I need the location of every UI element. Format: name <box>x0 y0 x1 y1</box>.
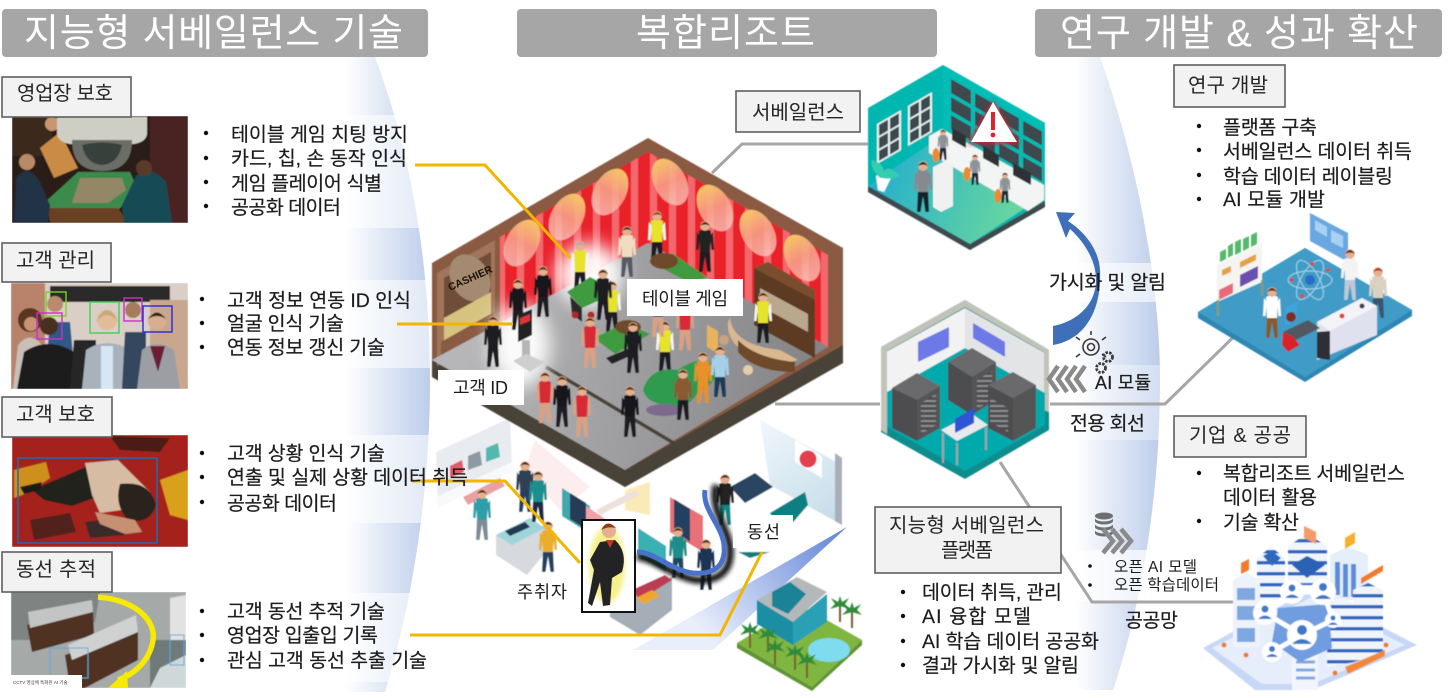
label: 기업 & 공공: 기업 & 공공 <box>1189 424 1291 447</box>
wall grid panels <box>877 110 901 164</box>
blue triangle floor shadow <box>633 527 847 650</box>
list: 고객 관리: 얼굴 인식 기술 <box>227 313 344 335</box>
rack left <box>892 373 940 400</box>
label: 테이블 게임: 테이블 게임 <box>642 289 728 309</box>
illustration: casino floor <box>432 138 843 487</box>
label: 연구 개발 <box>1174 65 1285 107</box>
icon: inbound chevrons <box>1049 366 1085 392</box>
gaming tables <box>567 277 600 308</box>
label: 테이블 게임 <box>627 279 743 316</box>
label: 지능형 서베일런스 플랫폼 <box>875 507 1061 573</box>
list: 고객 보호: 공공화 데이터 <box>227 493 337 515</box>
list: platform: 결과 가시화 및 알림 <box>922 655 1079 677</box>
label: 서베일런스: 서베일런스 <box>752 101 844 124</box>
kiosk <box>518 309 532 342</box>
list: 영업장 보호: 카드, 칩, 손 동작 인식 <box>231 148 407 170</box>
store tables <box>496 518 545 575</box>
list: platform: AI 학습 데이터 공공화 <box>922 631 1099 653</box>
list: 고객 보호: 연출 및 실제 상황 데이터 취득 <box>227 467 468 489</box>
label: 연구 개발: 연구 개발 <box>1188 74 1268 97</box>
label: 주취자: 주취자 <box>517 582 567 602</box>
list: 고객 관리 <box>200 290 411 359</box>
label: 동선 추적: 동선 추적 <box>16 558 96 581</box>
label: 고객 보호: 고객 보호 <box>16 403 95 426</box>
list: platform: 데이터 취득, 관리 <box>922 582 1062 604</box>
label: 고객 ID <box>438 370 524 405</box>
illustration: research lab <box>1198 213 1412 382</box>
label: 동선 추적 <box>2 552 112 592</box>
dealers behind tables <box>618 226 636 277</box>
connector lines: gray network <box>712 144 1258 602</box>
label: 동선: 동선 <box>747 522 780 542</box>
highlighted person: 주취자 <box>582 520 635 612</box>
icon: database and chevrons <box>1095 512 1131 553</box>
icon: AI module gears <box>1076 331 1112 372</box>
photo: fallen customer on carpet <box>12 435 188 547</box>
label: 공공망: 공공망 <box>1125 610 1178 632</box>
list: 고객 관리: 고객 정보 연동 ID 인식 <box>227 290 411 312</box>
list: 영업장 보호: 게임 플레이어 식별 <box>231 173 382 195</box>
bar counter <box>728 318 798 363</box>
list: platform <box>901 582 1099 677</box>
label: 고객 ID: 고객 ID <box>453 378 508 398</box>
list: 동선 추적: 관심 고객 동선 추출 기술 <box>227 650 427 672</box>
illustration: resort <box>737 577 862 691</box>
list: research: AI 모듈 개발 <box>1223 189 1325 211</box>
photo: face recognition group <box>11 283 188 389</box>
label: 전용 회선: 전용 회선 <box>1070 413 1145 435</box>
list: 동선 추적 <box>200 601 427 672</box>
list: research: 플랫폼 구축 <box>1223 117 1317 139</box>
list: 동선 추적: 영업장 입출입 기록 <box>227 625 378 647</box>
illustration: smart city <box>1203 526 1417 690</box>
plant <box>876 172 892 192</box>
label: 동선 <box>733 515 793 548</box>
list: 동선 추적: 고객 동선 추적 기술 <box>227 601 385 623</box>
liquor shelf and bar <box>754 268 815 358</box>
shelf <box>1217 243 1262 302</box>
label: 기업 & 공공 <box>1174 416 1306 457</box>
label: 서베일런스 <box>736 91 860 132</box>
CASHIER sign: CASHIER <box>446 263 495 294</box>
movement path <box>637 485 730 580</box>
list: 영업장 보호 <box>204 124 408 219</box>
label: 가시화 및 알림: 가시화 및 알림 <box>1049 272 1166 294</box>
label: 고객 보호 <box>2 397 112 437</box>
list: open data <box>1088 558 1219 594</box>
background: left blue crescent <box>340 57 432 692</box>
list: 고객 관리: 연동 정보 갱신 기술 <box>227 337 385 359</box>
desk and operators <box>929 129 1044 211</box>
list: open data: 오픈 학습데이터 <box>1114 576 1219 594</box>
illustration: retail store floor <box>433 415 848 652</box>
wall spotlights <box>496 213 548 273</box>
list: research <box>1197 117 1412 211</box>
wall monitors <box>951 79 1042 182</box>
lab desk <box>1317 298 1377 360</box>
illustration: server room <box>881 300 1049 479</box>
wall screen <box>1310 213 1348 262</box>
orange tags <box>1241 559 1249 574</box>
list: 고객 보호 <box>200 443 468 515</box>
list: enterprise: 기술 확산 <box>1223 512 1299 534</box>
warning triangle <box>968 100 1020 144</box>
label: 고객 관리: 고객 관리 <box>16 249 95 272</box>
heading: right column: 연구 개발 & 성과 확산 <box>1060 13 1418 55</box>
desk with monitor <box>941 414 988 441</box>
label: 고객 관리 <box>2 243 111 282</box>
illustration: surveillance room <box>868 65 1045 250</box>
white attention glows <box>556 243 624 307</box>
list: open data: 오픈 AI 모델 <box>1114 558 1197 576</box>
clothing racks <box>562 488 590 534</box>
label: 영업장 보호 <box>2 77 131 117</box>
list: research: 학습 데이터 레이블링 <box>1223 166 1393 188</box>
people at casino <box>509 279 527 330</box>
scientists behind desk <box>1341 249 1359 300</box>
rack middle <box>948 348 996 377</box>
network nodes <box>1265 592 1333 652</box>
label: 지능형 서베일런스 플랫폼: 플랫폼 <box>941 539 993 562</box>
atom <box>1288 256 1332 304</box>
list: 고객 보호: 고객 상황 인식 기술 <box>227 443 385 465</box>
background: right blue crescent <box>1048 57 1167 690</box>
towers <box>1288 534 1327 585</box>
photo: dome camera over casino table <box>12 116 188 223</box>
heading: left column: 지능형 서베일런스 기술 <box>24 13 403 55</box>
list: research: 서베일런스 데이터 취득 <box>1223 141 1412 163</box>
rack right <box>988 372 1036 398</box>
heading: center column: 복합리조트 <box>636 13 815 55</box>
heading: center column <box>517 9 937 57</box>
photo: store CCTV with movement path <box>11 592 186 688</box>
label: 지능형 서베일런스 플랫폼: 지능형 서베일런스 <box>889 514 1044 537</box>
shoppers <box>473 489 491 540</box>
list: enterprise: 데이터 활용 <box>1223 487 1317 509</box>
label: 영업장 보호: 영업장 보호 <box>17 82 113 105</box>
list: enterprise <box>1197 463 1405 534</box>
list: 영업장 보호: 테이블 게임 치팅 방지 <box>231 124 408 146</box>
label: AI 모듈: AI 모듈 <box>1095 373 1151 393</box>
arrow: visualization loop <box>1053 212 1100 345</box>
list: 영업장 보호: 공공화 데이터 <box>231 197 341 219</box>
connector lines: yellow callouts <box>397 165 762 635</box>
photo: store CCTV with movement path: CCTV 영상에 특화된 AI 기술 <box>13 679 68 686</box>
list: platform: AI 융합 모델 <box>922 606 1031 628</box>
list: enterprise: 복합리조트 서베일런스 <box>1223 463 1405 485</box>
